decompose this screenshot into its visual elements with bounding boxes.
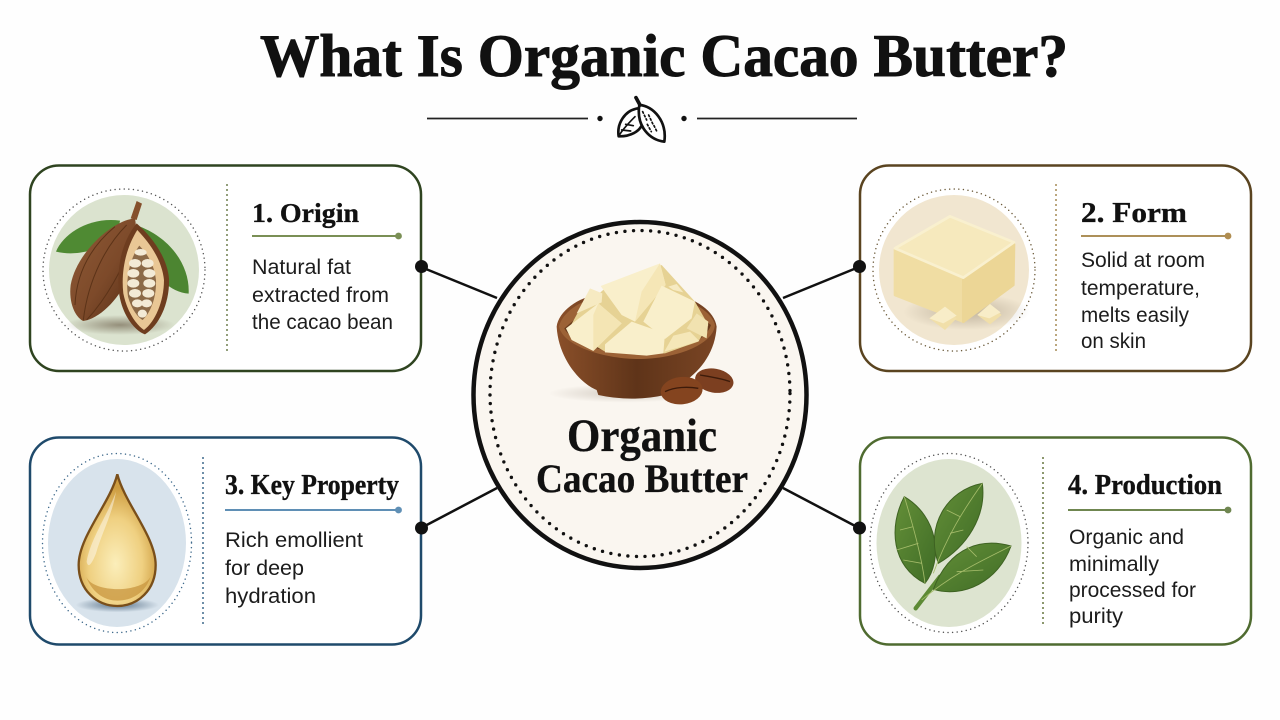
description: minimally [1069,552,1159,576]
icon: cacao pods [56,201,189,335]
title ornament [427,98,857,142]
heading rule [252,233,402,239]
title: What Is Organic Cacao Butter? [260,23,1068,89]
description: the cacao bean [252,310,393,334]
heading: 1. Origin [252,197,359,228]
description: temperature, [1081,276,1200,300]
panel: 4. Production [860,438,1251,644]
description: hydration [225,584,316,608]
panel: 1. Origin [30,166,421,371]
description [252,255,393,334]
hub label [536,410,748,501]
heading rule [1081,233,1231,239]
description: extracted from [252,283,389,307]
description: Natural fat [252,255,351,279]
description: purity [1069,604,1123,628]
heading: 2. Form [1081,198,1187,229]
description: melts easily [1081,303,1189,327]
icon: bowl of cacao butter [548,263,735,406]
description: on skin [1081,329,1146,353]
heading rule [225,507,402,513]
icon: butter block [895,216,1030,330]
description [1069,525,1196,628]
hub label: Cacao Butter [536,456,748,501]
description [1081,248,1205,353]
description: Solid at room [1081,248,1205,272]
icon: oil drop [76,474,159,612]
description [225,528,363,608]
connector lines [415,260,866,534]
panel: 3. Key Property [30,438,421,644]
icon: green leaves [895,483,1011,608]
heading: 3. Key Property [225,470,399,501]
panel: central hub [474,222,806,568]
hub label: Organic [567,410,717,462]
description: processed for [1069,578,1196,602]
description: for deep [225,556,304,580]
heading: 4. Production [1068,470,1222,501]
panel: 2. Form [860,166,1251,371]
heading rule [1068,507,1231,513]
description: Rich emollient [225,528,363,552]
description: Organic and [1069,525,1184,549]
